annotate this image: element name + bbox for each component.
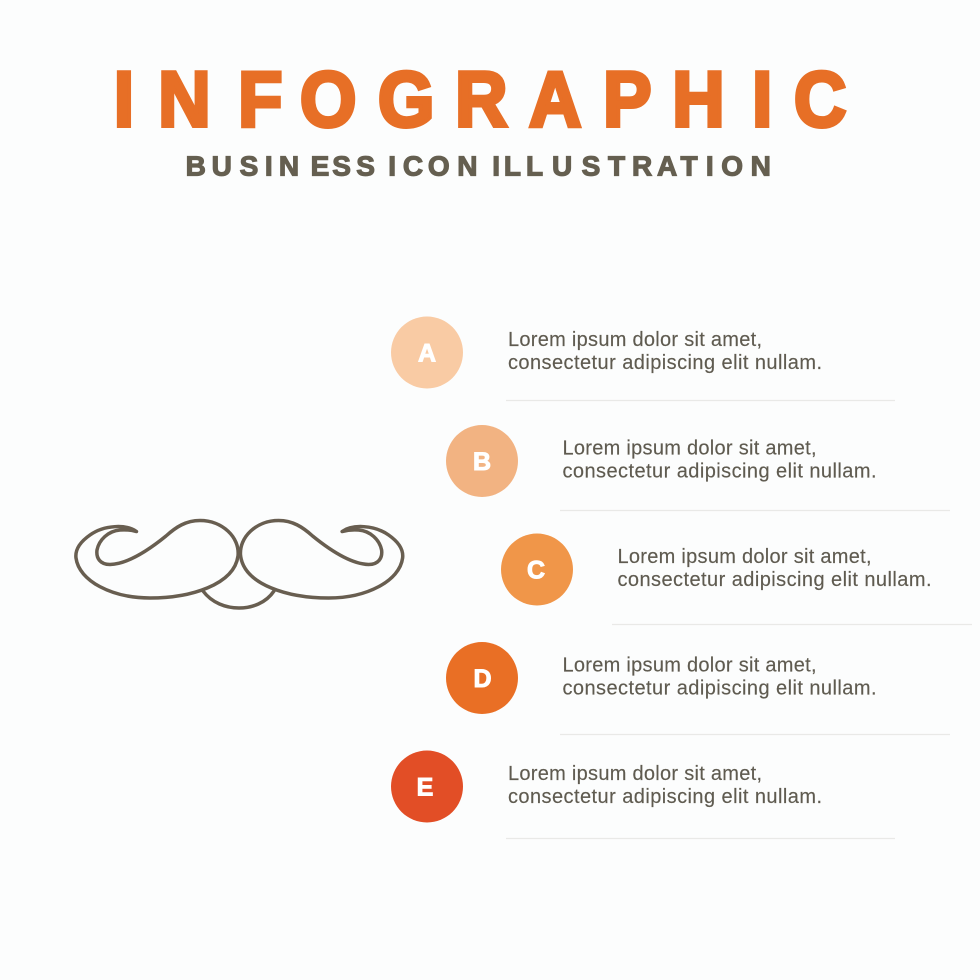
item B (446, 425, 950, 510)
badge E: E (417, 773, 433, 801)
badge A: A (418, 339, 436, 367)
subtitle: BUSINESSICONILLUSTRATION (186, 150, 771, 182)
badge B (446, 425, 518, 497)
badge A (391, 316, 463, 388)
icon: mustache (76, 520, 403, 608)
text C: Lorem ipsum dolor sit amet, (618, 546, 872, 568)
text D (562, 654, 876, 700)
badge B: B (473, 448, 491, 476)
item E (391, 750, 895, 838)
badge D: D (473, 665, 492, 693)
text A (508, 329, 822, 374)
text C: consectetur adipiscing elit nullam. (618, 569, 932, 591)
badge C: C (527, 556, 545, 584)
text A: consectetur adipiscing elit nullam. (508, 352, 822, 374)
text C (618, 546, 932, 591)
badge D (446, 642, 518, 714)
title: INFOGRAPHIC (114, 56, 846, 143)
text E: consectetur adipiscing elit nullam. (508, 786, 822, 808)
text A: Lorem ipsum dolor sit amet, (508, 329, 762, 351)
item D (446, 642, 950, 734)
item A (391, 316, 895, 400)
text B: consectetur adipiscing elit nullam. (562, 460, 876, 482)
text D: Lorem ipsum dolor sit amet, (562, 654, 816, 676)
text E: Lorem ipsum dolor sit amet, (508, 763, 762, 785)
text B: Lorem ipsum dolor sit amet, (562, 438, 816, 460)
item C (501, 534, 972, 624)
badge C (501, 534, 573, 606)
text D: consectetur adipiscing elit nullam. (562, 678, 876, 700)
badge E (391, 750, 463, 822)
text E (508, 763, 822, 808)
text B (562, 438, 876, 482)
